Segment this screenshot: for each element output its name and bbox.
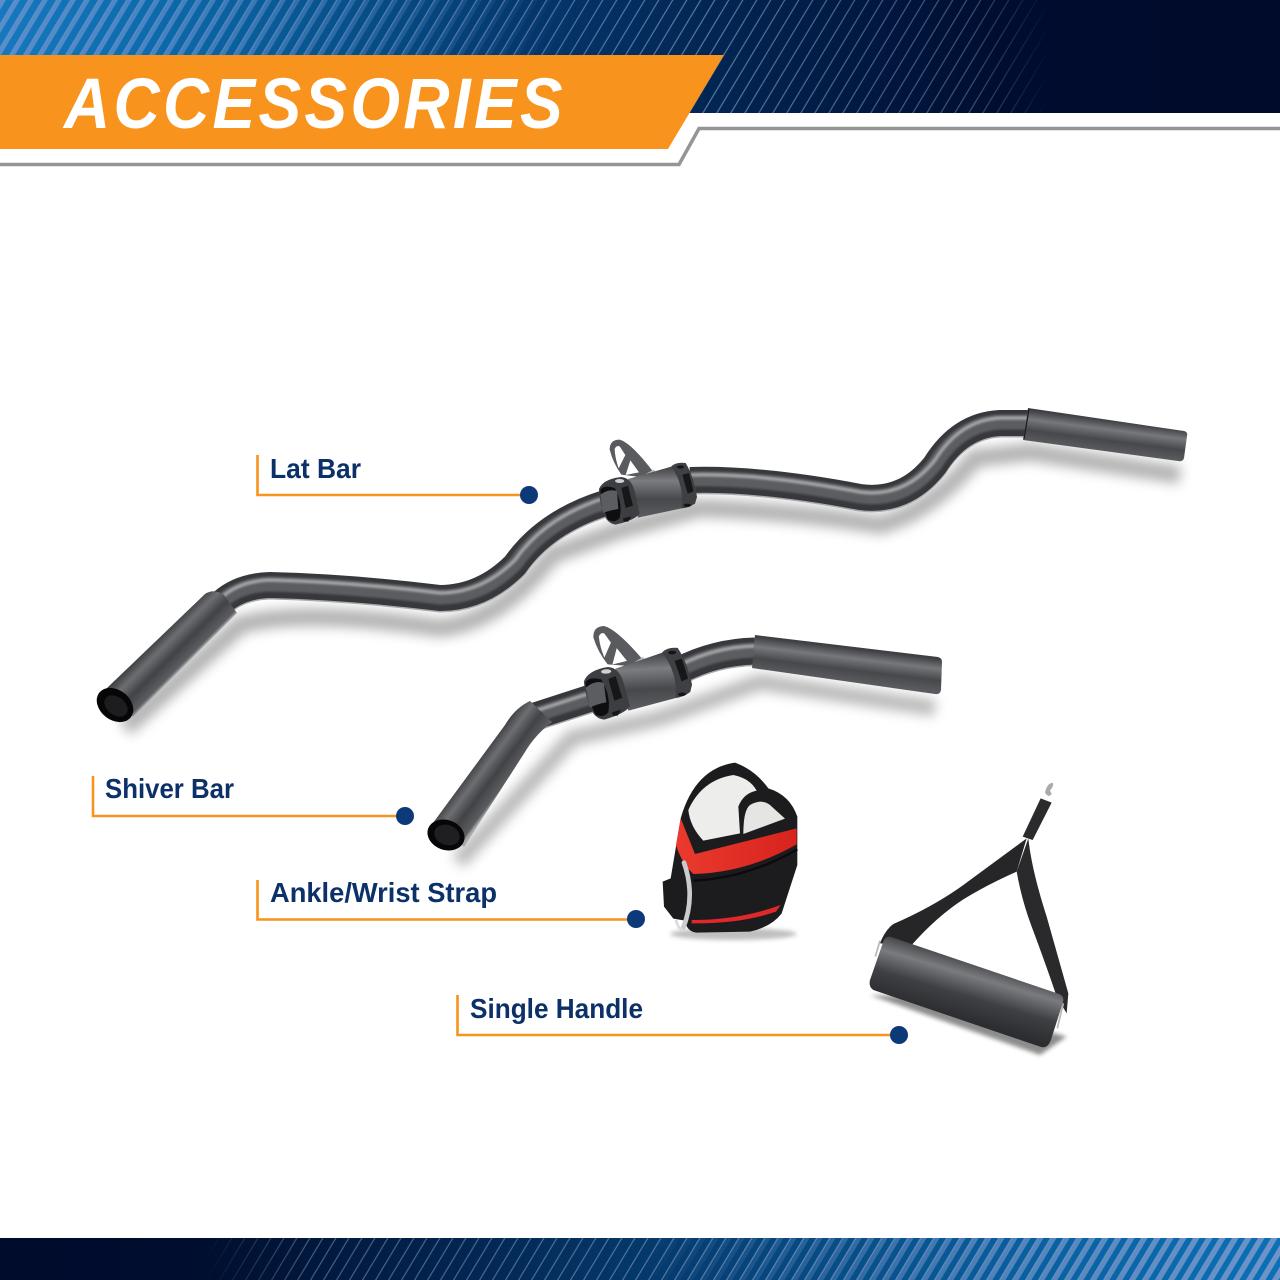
label: shiver bar: Shiver Bar — [105, 773, 234, 804]
center clamp and attachment loop — [599, 440, 697, 525]
red stripe — [692, 905, 781, 923]
top tab and hook — [1023, 783, 1053, 840]
marker dot — [520, 486, 538, 504]
label: single handle: Single Handle — [470, 993, 643, 1024]
product: single handle — [870, 783, 1068, 1055]
webbing strap — [880, 838, 1068, 1013]
marker dot — [627, 910, 645, 928]
header banner — [0, 0, 1280, 164]
label: lat bar: Lat Bar — [270, 453, 361, 484]
callout: single handle — [458, 993, 908, 1044]
callout: ankle/wrist strap — [258, 877, 645, 928]
label: ankle/wrist strap: Ankle/Wrist Strap — [270, 877, 497, 908]
white interior — [688, 775, 757, 841]
right grip — [1023, 408, 1187, 461]
footer band — [0, 1238, 1280, 1280]
grip cylinder — [870, 937, 1063, 1047]
red band — [676, 818, 797, 874]
right grip — [752, 635, 942, 694]
center clamp and attachment loop — [581, 622, 694, 721]
left grip — [90, 591, 237, 729]
callout: shiver bar — [93, 773, 414, 825]
left grip — [423, 701, 552, 856]
velcro shade — [693, 849, 797, 881]
product: lat bar — [90, 408, 1187, 729]
marker dot — [890, 1026, 908, 1044]
product: ankle/wrist strap — [663, 763, 797, 940]
metal ring — [683, 863, 690, 929]
callout: lat bar — [258, 453, 538, 504]
marker dot — [396, 807, 414, 825]
product: shiver bar — [423, 622, 942, 862]
black strap body — [663, 763, 797, 933]
title: ACCESSORIES — [62, 65, 563, 144]
title ribbon — [0, 55, 1280, 164]
